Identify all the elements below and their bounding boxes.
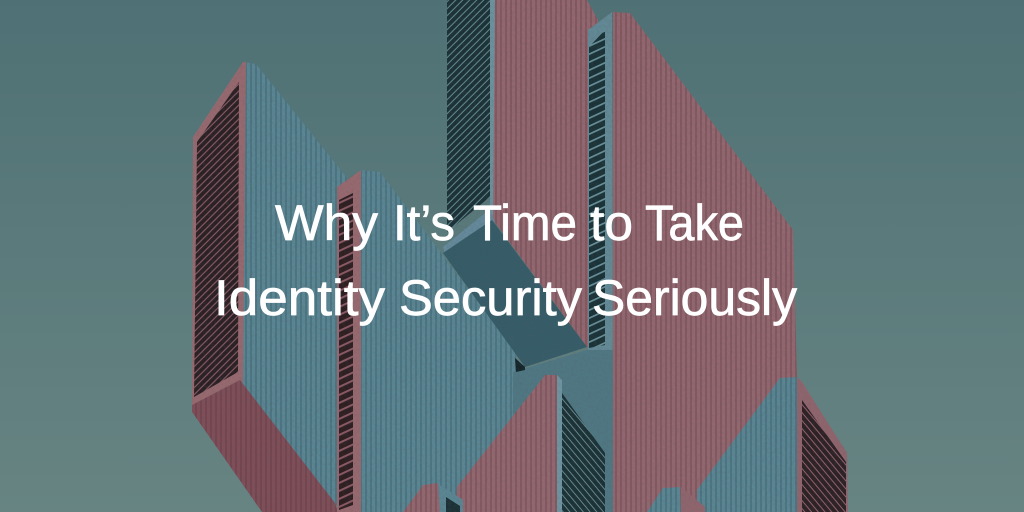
right tower window [589,30,605,348]
left tower red underside [192,380,338,512]
centre tower red face [493,0,598,350]
title line 1: to [590,195,633,251]
overhang underside [443,220,587,367]
title line 1: Why [275,195,378,251]
concrete texture on towers [190,0,850,512]
lower centre blue strip [557,375,562,512]
title line 2: Seriously [592,270,797,326]
lower centre red face [455,375,557,512]
small block bottom centre [403,483,463,512]
building: left blue tower [192,62,347,512]
building: middle blue tower [337,170,613,512]
overhang dark vent [515,358,525,372]
lower right red side [797,377,848,512]
middle tower window [339,193,353,510]
centre tower window [447,0,490,232]
lower centre window [562,393,605,512]
middle tower red strip [337,170,361,512]
title line 2: Identity [214,270,385,326]
building: lower centre red block [455,375,605,512]
title line 1: Take [645,195,744,251]
left tower blue face [240,62,347,512]
left tower window [194,82,239,397]
small block bottom right [647,487,705,512]
building: lower right block [697,377,848,512]
title line 1: It’s [393,195,455,251]
right tower red face [613,12,797,512]
lower right window [802,400,846,512]
lower right blue face [697,377,797,512]
title line 1: Time [473,195,577,251]
title line 2: Security [399,270,582,326]
overhang lit edge [443,209,495,260]
middle tower concrete base [513,350,613,512]
left tower red side [192,62,246,410]
dark blue overhang [443,209,587,372]
building: right red tower [588,12,797,512]
building: centre red tower [447,0,598,350]
title [214,195,797,326]
middle tower blue face [361,170,516,512]
right tower blue strip [588,12,613,512]
